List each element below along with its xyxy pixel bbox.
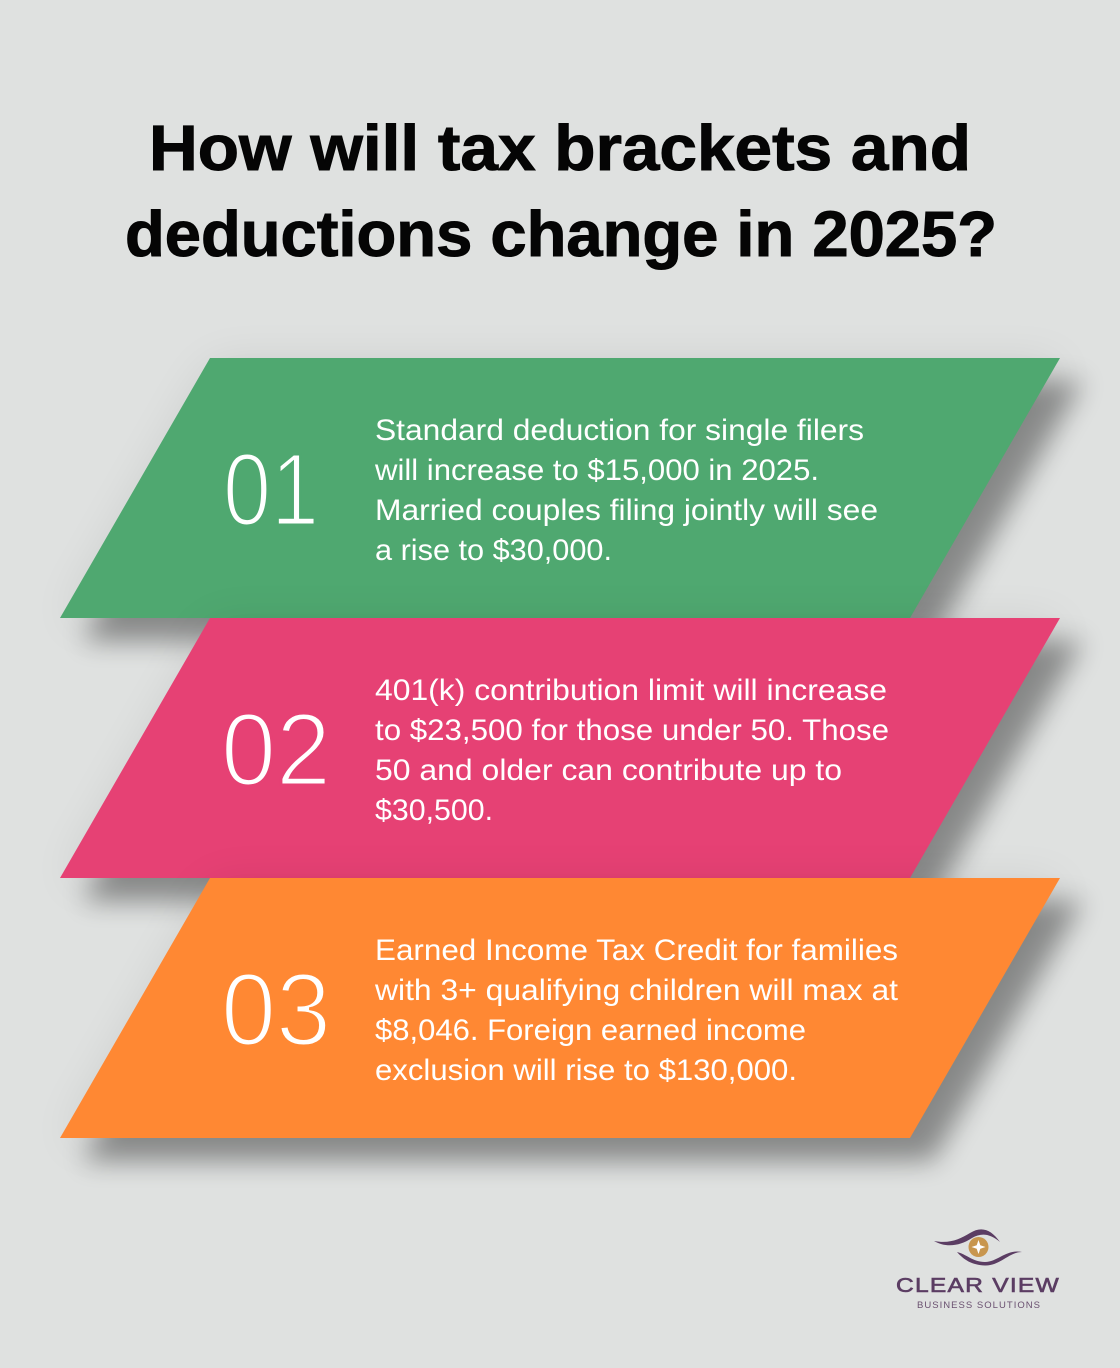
text: earned income credit: with 3+ qualifying children will max at (374, 974, 899, 1007)
text: 401(k) limit (375, 674, 889, 827)
text: standard deduction: will increase to $15,000 in 2025. (374, 454, 819, 487)
title: deductions change in 2025? (125, 198, 997, 270)
title: How will tax brackets and (149, 112, 971, 184)
text: standard deduction: a rise to $30,000. (375, 534, 612, 567)
text: 401(k) limit: 50 and older can contribute up to (375, 754, 842, 787)
number 03: 03 (221, 952, 331, 1067)
text: standard deduction (374, 414, 878, 567)
text: 401(k) limit: $30,500. (375, 794, 493, 827)
tagline: BUSINESS SOLUTIONS (917, 1300, 1040, 1311)
number 01: 01 (223, 432, 319, 547)
text: standard deduction: Standard deduction for single filers (375, 414, 864, 447)
title (125, 112, 997, 270)
text: earned income credit: exclusion will rise to $130,000. (375, 1054, 797, 1087)
panel: step 01 standard deduction (60, 358, 1083, 641)
icon: eye swooshes and star (934, 1229, 1022, 1266)
panel: step 02 401(k) limit (60, 618, 1083, 901)
text: earned income credit: $8,046. Foreign earned income (375, 1014, 806, 1047)
text: 401(k) limit: to $23,500 for those under 50. Those (375, 714, 889, 747)
panel: step 03 earned income credit (60, 878, 1083, 1161)
text: earned income credit: Earned Income Tax Credit for families (375, 934, 898, 967)
text: 401(k) limit: 401(k) contribution limit will increase (375, 674, 887, 707)
number 02: 02 (221, 692, 331, 807)
logo: Clear View Business Solutions (896, 1229, 1060, 1311)
wordmark: CLEAR VIEW (896, 1275, 1060, 1297)
text: standard deduction: Married couples filing jointly will see (375, 494, 878, 527)
text: earned income credit (374, 934, 899, 1087)
